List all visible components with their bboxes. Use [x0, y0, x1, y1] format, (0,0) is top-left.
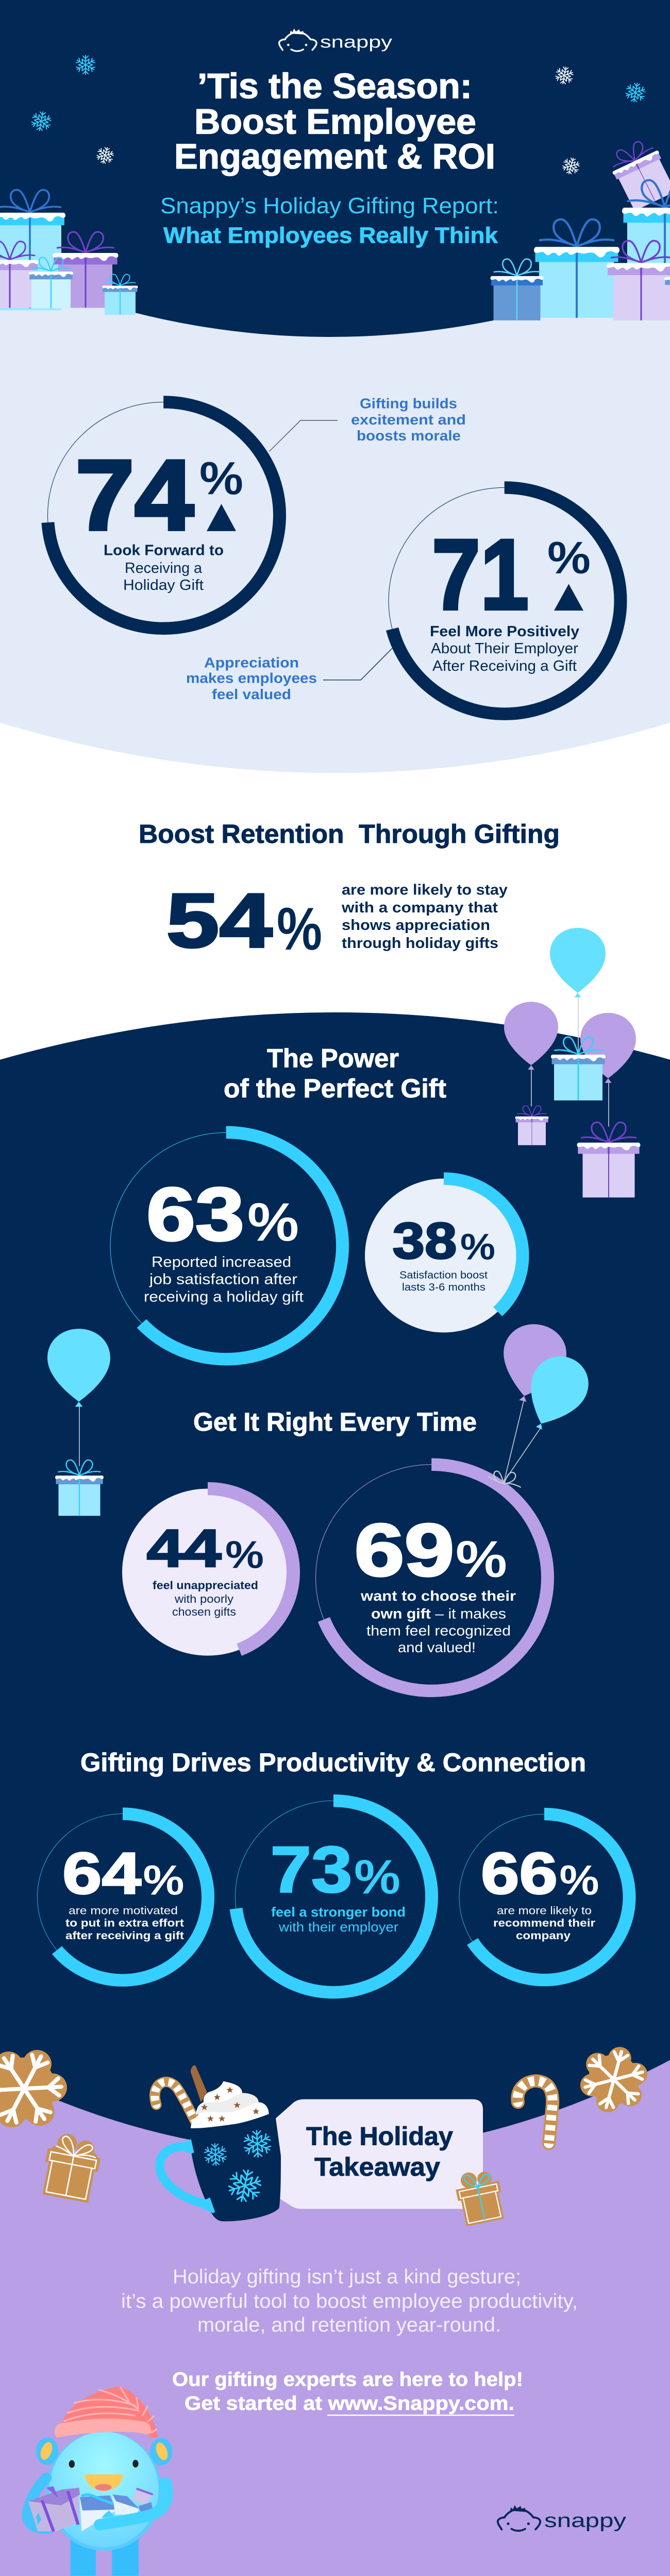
subtitle	[160, 193, 499, 248]
number 69: %	[456, 1530, 507, 1588]
gifts right group	[491, 135, 670, 320]
ring: 38%	[365, 1179, 523, 1332]
number 73: 73	[270, 1834, 352, 1906]
balloon: cyan	[47, 1329, 110, 1407]
balloons with gifts top right	[504, 928, 640, 1197]
subtitle: What Employees Really Think	[163, 223, 498, 248]
icon: up triangle	[554, 584, 583, 611]
label: job satisfaction after	[149, 1272, 298, 1288]
number 44: 44	[146, 1519, 221, 1579]
icon: up triangle	[207, 504, 236, 531]
panel: stat 74 percent	[47, 396, 466, 629]
heading: of the Perfect Gift	[224, 1074, 446, 1103]
label: lasts 3-6 months	[402, 1281, 485, 1293]
panel: holiday takeaway	[0, 2034, 653, 2575]
gifts left group	[0, 190, 138, 315]
heading: Get It Right Every Time	[193, 1408, 477, 1436]
gift: blue	[491, 259, 543, 320]
mascot	[27, 2386, 172, 2575]
logo: snappy navy	[498, 2505, 626, 2532]
gift: cyan blue lid	[55, 1460, 104, 1516]
tag heading	[306, 2122, 453, 2181]
mug snowflakes	[204, 2130, 272, 2205]
panel: hero header	[0, 28, 670, 320]
cinnamon stick	[191, 2065, 207, 2102]
ring: 64%	[37, 1814, 208, 1980]
ring: 74%	[47, 402, 279, 629]
callout: excitement: excitement and	[351, 412, 466, 428]
text	[341, 882, 508, 952]
balloon gift left	[47, 1329, 110, 1516]
ring: 66%	[459, 1814, 629, 1980]
cookie: snowflake right	[580, 2047, 647, 2112]
label: chosen gifts	[172, 1605, 236, 1618]
number 44	[146, 1519, 264, 1579]
label: are more motivated	[69, 1904, 178, 1917]
number 71: %	[547, 532, 591, 583]
callout: excitement	[351, 396, 466, 444]
ring: 63%	[110, 1132, 342, 1359]
label	[493, 1904, 596, 1942]
number 73: %	[354, 1850, 400, 1904]
label	[65, 1904, 184, 1942]
number 64: 64	[62, 1841, 141, 1906]
label: feel unappreciated	[153, 1579, 258, 1592]
gift: pale cyan	[29, 257, 73, 308]
number 38	[392, 1212, 495, 1269]
heading: Gifting Drives Productivity & Connection	[80, 1748, 586, 1777]
hat	[55, 2386, 158, 2437]
ears	[36, 2437, 172, 2466]
callout: appreciation: makes employees	[186, 670, 317, 686]
title: Engagement & ROI	[174, 137, 495, 176]
mug handle	[160, 2139, 215, 2213]
heading	[224, 1043, 446, 1103]
number 66: 66	[481, 1841, 558, 1906]
mug body	[189, 2118, 281, 2222]
gift: small lilac	[515, 1106, 548, 1145]
number 54	[166, 878, 322, 964]
label: Receiving a	[125, 560, 202, 577]
number 66: %	[560, 1856, 599, 1904]
number 38: 38	[392, 1212, 457, 1269]
takeaway body text	[121, 2265, 578, 2336]
left arm	[27, 2478, 50, 2529]
heading: The Power	[267, 1043, 399, 1073]
gifts held	[28, 2486, 154, 2531]
number 69	[355, 1509, 507, 1591]
text: through holiday gifts	[342, 935, 498, 952]
callout: appreciation	[186, 655, 317, 702]
takeaway body text: morale, and retention year-round.	[197, 2314, 501, 2336]
number 64	[62, 1841, 185, 1906]
mug with cream and cane	[155, 2065, 281, 2222]
label	[360, 1588, 516, 1655]
number 38: %	[460, 1227, 495, 1267]
gift: purple	[53, 232, 119, 308]
panel: power of the perfect gift	[110, 1043, 523, 1359]
tag heading: Takeaway	[314, 2153, 440, 2181]
label	[104, 543, 224, 594]
callout: excitement: Gifting builds	[360, 396, 457, 412]
balloons over ring	[489, 1318, 598, 1487]
label: Look Forward to	[104, 543, 224, 559]
panel: productivity and connection	[37, 1748, 629, 1992]
legs	[71, 2535, 139, 2575]
panel: retention	[139, 819, 560, 964]
number 74	[75, 439, 243, 551]
title: ’Tis the Season:	[197, 66, 472, 106]
number 63: 63	[146, 1173, 244, 1257]
snowflakes	[29, 55, 647, 176]
callout: appreciation: feel valued	[212, 686, 291, 702]
gift: light purple right	[607, 241, 670, 320]
balloon: purple	[492, 1318, 573, 1409]
ring: 69%	[315, 1465, 547, 1691]
number 74: 74	[75, 439, 194, 551]
gift: far right cyan	[622, 179, 670, 263]
label	[399, 1269, 488, 1293]
callout leader line	[269, 420, 338, 452]
title	[174, 66, 495, 176]
label	[144, 1254, 304, 1305]
label: them feel recognized	[366, 1623, 511, 1638]
call to action: Our gifting experts are here to help!	[172, 2368, 523, 2391]
label: to put in extra effort	[65, 1917, 184, 1929]
number 64: %	[143, 1856, 184, 1904]
cookie: gift right	[456, 2172, 504, 2227]
label: recommend their	[493, 1917, 596, 1929]
gift: large cyan	[0, 190, 65, 310]
logo: snappy navy: snappy	[544, 2510, 626, 2532]
ring: 44%	[122, 1488, 293, 1656]
text: shows appreciation	[342, 917, 490, 934]
callout: excitement: boosts morale	[357, 428, 461, 444]
body	[46, 2432, 161, 2551]
ring: 71%	[389, 487, 621, 714]
cookie: gift left	[42, 2134, 101, 2203]
label: company	[516, 1929, 571, 1942]
label: receiving a holiday gift	[144, 1289, 304, 1305]
label	[430, 623, 579, 674]
takeaway body text: Holiday gifting isn’t just a kind gesture;	[173, 2265, 521, 2288]
number 71: 71	[432, 518, 529, 631]
logo: snappy white: snappy	[320, 33, 392, 52]
face	[69, 2460, 139, 2491]
label: with poorly	[174, 1592, 234, 1605]
ribbon bow	[489, 1471, 521, 1487]
gift: tilted lilac	[612, 141, 670, 208]
logo: snappy white	[279, 28, 392, 52]
label	[271, 1905, 406, 1935]
right arm	[99, 2483, 167, 2524]
balloon: cyan	[513, 1347, 598, 1440]
callout: appreciation: Appreciation	[204, 655, 299, 670]
gift: clipped small at edge	[664, 273, 670, 285]
number 54: %	[277, 895, 322, 963]
balloon: purple left	[504, 1002, 558, 1070]
number 44: %	[225, 1534, 264, 1577]
callout leader line	[323, 648, 392, 680]
tag heading: The Holiday	[306, 2122, 453, 2150]
heading: Boost Retention Through Gifting	[139, 819, 560, 849]
label	[153, 1579, 258, 1618]
label: after receiving a gift	[65, 1929, 184, 1942]
cookie: snowflake left	[0, 2049, 67, 2128]
whipped cream	[191, 2081, 269, 2128]
number 63	[146, 1173, 299, 1257]
candy cane on mug	[155, 2082, 196, 2122]
number 54: 54	[166, 878, 272, 964]
gift: large lilac	[577, 1122, 640, 1197]
balloon: cyan	[550, 928, 606, 997]
panel: stat 71 percent	[186, 487, 621, 714]
label: want to choose their	[360, 1588, 516, 1604]
label: Satisfaction boost	[399, 1269, 488, 1281]
gift: blue lid	[551, 1037, 606, 1100]
title: Boost Employee	[194, 101, 476, 141]
gift: light purple left	[0, 242, 39, 308]
number 73	[270, 1834, 400, 1906]
call to action: Get started at www.Snappy.com.	[185, 2393, 514, 2414]
label: About Their Employer	[431, 640, 578, 657]
text: are more likely to stay	[342, 882, 508, 899]
takeaway tag	[276, 2099, 483, 2209]
label: After Receiving a Gift	[432, 658, 577, 674]
panel: get it right every time	[122, 1318, 598, 1691]
label: own gift – it makes	[371, 1606, 506, 1621]
label: Reported increased	[152, 1254, 291, 1270]
balloon: purple right	[580, 1013, 636, 1083]
number 69: 69	[355, 1509, 455, 1591]
label: Feel More Positively	[430, 623, 579, 640]
call to action	[172, 2368, 523, 2416]
label: feel a stronger bond	[271, 1905, 406, 1920]
label: are more likely to	[497, 1904, 592, 1917]
takeaway body text: it’s a powerful tool to boost employee productivity,	[121, 2290, 578, 2313]
gift: small cyan	[102, 274, 138, 315]
gift: large cyan right	[534, 219, 619, 318]
number 74: %	[199, 453, 243, 504]
subtitle: Snappy’s Holiday Gifting Report:	[160, 193, 499, 218]
label: Holiday Gift	[123, 577, 204, 594]
number 66	[481, 1841, 599, 1906]
text: with a company that	[341, 900, 498, 916]
candy cane right	[517, 2081, 552, 2143]
label: and valued!	[398, 1639, 476, 1655]
label: with their employer	[278, 1919, 398, 1935]
ring: 73%	[235, 1801, 432, 1992]
number 63: %	[247, 1192, 299, 1252]
